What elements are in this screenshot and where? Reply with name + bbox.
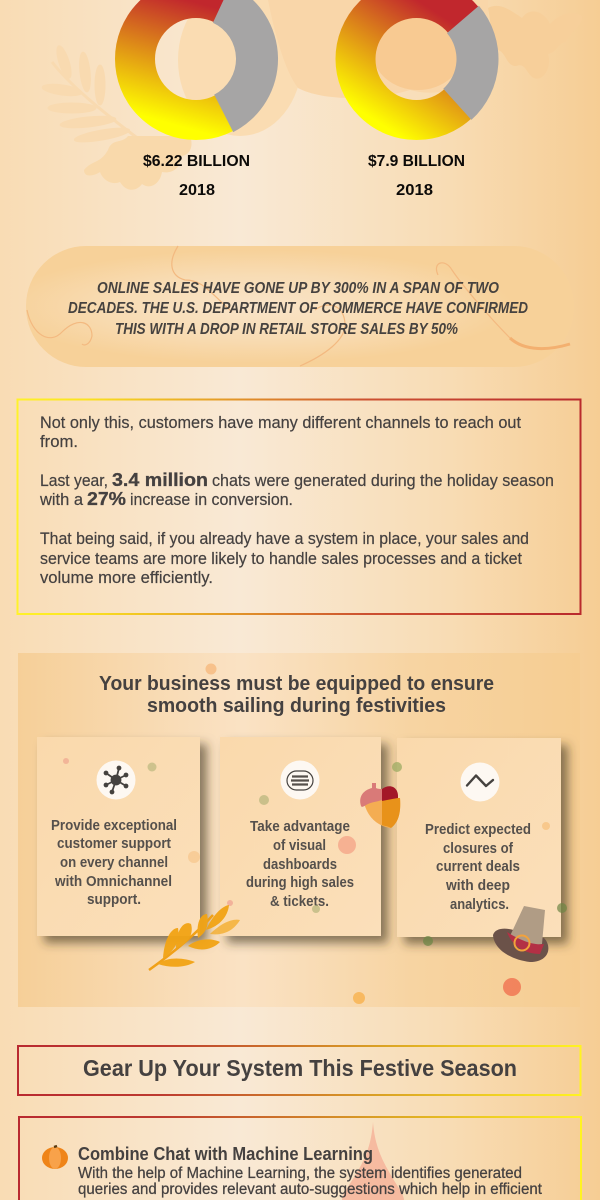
card text: of visual [273,838,326,854]
card text: with deep [445,878,510,894]
panel: channels text box [18,400,580,614]
paragraph text: with a [39,491,84,509]
callout text [68,280,528,338]
paragraph text: Last year, [40,472,108,490]
donut label: 6.22 billion: $6.22 BILLION [143,153,250,170]
panel heading: smooth sailing during festivities [147,694,446,717]
icon: trend line [460,762,500,802]
donut chart: 2018 $6.22 billion [135,0,278,132]
card text: current deals [436,859,520,875]
card text [51,818,177,908]
card text: closures of [443,841,513,857]
tip text [78,1165,543,1198]
icon: pumpkin [42,1146,68,1169]
card text [246,819,354,910]
callout text: DECADES. THE U.S. DEPARTMENT OF COMMERCE HAVE CONFIRMED [68,300,528,317]
card text: customer support [57,836,171,852]
background oak leaf, upper right [488,6,582,79]
icon: pilgrim hat [493,906,548,962]
paragraph text: 27% [87,488,126,509]
panel heading [99,672,494,717]
tip heading: Combine Chat with Machine Learning [78,1144,373,1164]
callout pill [26,246,574,367]
card text [425,822,531,913]
card text: on every channel [60,855,168,871]
donut year: right: 2018 [396,182,433,199]
icon: acorn [360,783,400,828]
donut label: 7.9 billion: $7.9 BILLION [368,153,465,170]
card: analytics [397,738,561,937]
callout text: ONLINE SALES HAVE GONE UP BY 300% IN A SPAN OF TWO [97,280,499,297]
paragraph text: from. [40,433,78,451]
paragraph text: service teams are more likely to handle sales processes and a ticket [40,550,522,568]
panel heading: Your business must be equipped to ensure [99,672,494,695]
panel: system tips [19,1117,581,1200]
paragraph text: increase in conversion. [130,491,293,509]
donut chart: 2018 $7.9 billion [356,0,498,120]
card: dashboards [220,737,381,936]
icon: network hub [96,760,136,800]
card text: Predict expected [425,822,531,838]
section heading: Gear Up Your System This Festive Season [83,1055,517,1081]
card text: Take advantage [250,819,350,835]
card text: Provide exceptional [51,818,177,834]
card text: & tickets. [270,894,329,910]
paragraph text [39,414,554,587]
donut year: left: 2018 [179,182,215,199]
paragraph text: volume more efficiently. [40,569,213,587]
panel: business equipped [18,653,580,1007]
background pumpkin illustration [178,0,488,136]
icon: autumn sprig [149,905,240,970]
background oak leaf, lower left [84,136,192,190]
card text: dashboards [263,857,337,873]
card text: with Omnichannel [54,874,172,890]
tip text: With the help of Machine Learning, the system identifies generated [78,1165,522,1182]
background fern leaf [41,44,140,145]
paragraph text: chats were generated during the holiday season [212,472,554,490]
icon: dashboard lines [280,760,320,800]
paragraph text: Not only this, customers have many different channels to reach out [40,414,521,432]
decorative teardrop [342,1122,404,1200]
heading box: gear up [18,1046,580,1095]
card text: during high sales [246,875,354,891]
card text: analytics. [450,897,509,913]
decorative confetti dots [63,664,567,1004]
card: omnichannel [37,737,200,936]
card text: support. [87,892,141,908]
paragraph text: That being said, if you already have a system in place, your sales and [40,530,529,548]
paragraph text: 3.4 million [112,469,208,490]
tip text: queries and provides relevant auto-suggestions which help in efficient [78,1181,543,1198]
callout text: THIS WITH A DROP IN RETAIL STORE SALES BY 50% [115,321,458,338]
